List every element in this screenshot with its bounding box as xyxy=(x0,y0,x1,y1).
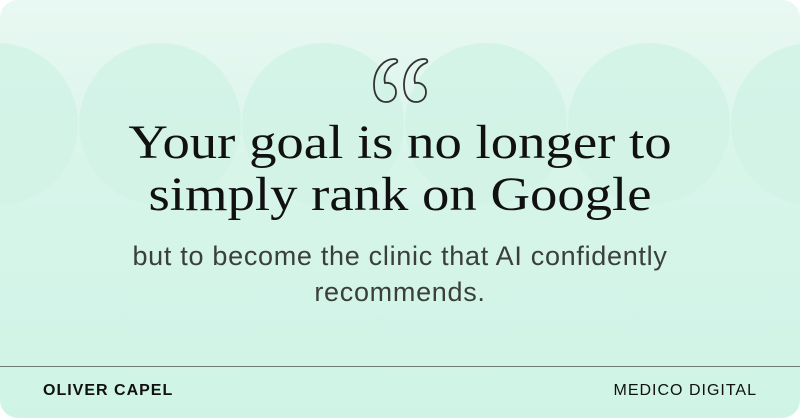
icon: quote mark xyxy=(373,58,428,103)
headline: Your goal is no longer to xyxy=(128,116,672,169)
decorative circles row xyxy=(0,43,800,126)
headline: simply rank on Google xyxy=(148,168,652,221)
subtitle xyxy=(132,241,668,307)
divider line xyxy=(0,366,800,367)
headline xyxy=(128,116,672,221)
subtitle: but to become the clinic that AI confidently xyxy=(132,241,668,271)
footer: author: OLIVER CAPEL xyxy=(43,382,173,399)
subtitle: recommends. xyxy=(314,277,486,307)
footer: company: MEDICO DIGITAL xyxy=(614,382,757,399)
